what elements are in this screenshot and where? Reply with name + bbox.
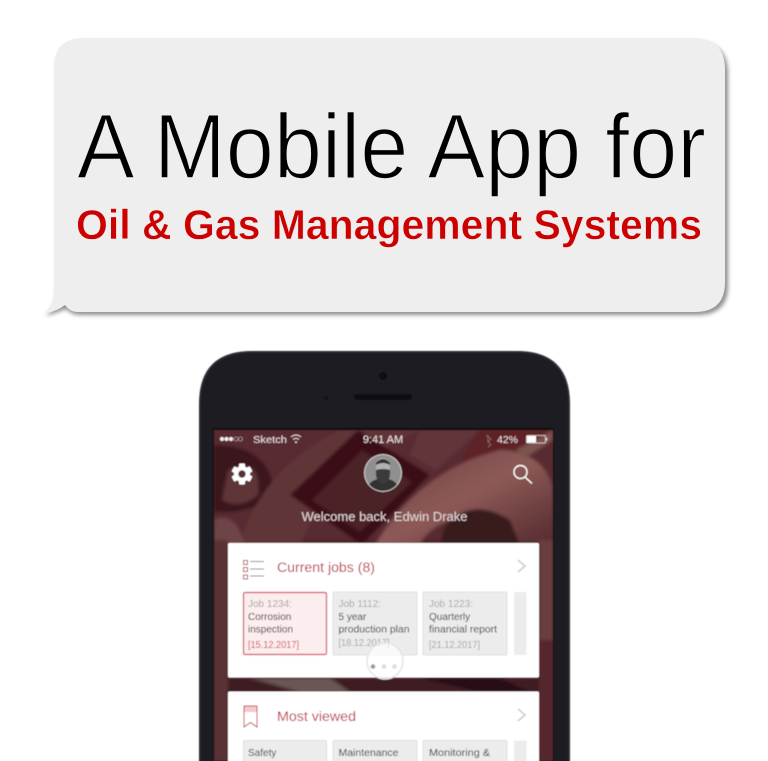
job card 1234: Job 1234: — [248, 599, 292, 610]
title: A Mobile App for — [77, 96, 706, 198]
job card 1112: [18.12.2017] — [338, 638, 390, 649]
phone — [199, 351, 570, 761]
job card 1223: financial report — [429, 624, 497, 636]
welcome text: Welcome back, Edwin Drake — [302, 509, 468, 524]
icon: chevron — [518, 709, 525, 721]
battery icon — [526, 436, 547, 443]
battery percent: 42% — [497, 434, 518, 446]
phone body — [199, 351, 570, 761]
icon: settings gear — [231, 464, 253, 484]
pagination dots — [371, 664, 397, 669]
job card 1223: Quarterly — [429, 612, 470, 623]
job card 1223: Job 1223: — [429, 599, 473, 610]
icon: chevron — [518, 560, 525, 572]
document card: monitoring: Monitoring & — [429, 748, 490, 759]
document card: safety: Safety — [248, 748, 276, 759]
icon: bookmark — [244, 706, 257, 727]
job card 1112: 5 year — [338, 612, 367, 623]
avatar — [364, 454, 402, 492]
bluetooth icon — [486, 435, 491, 447]
panel: current jobs — [228, 543, 539, 679]
job card 1234 — [244, 592, 326, 654]
front camera — [379, 372, 387, 380]
document card: monitoring — [423, 740, 507, 761]
icon: search — [514, 466, 532, 484]
icon: checklist — [244, 560, 264, 579]
job card 1112 — [333, 592, 417, 655]
job card 1112: production plan — [338, 624, 410, 636]
job card 1223: [21.12.2017] — [429, 640, 480, 651]
heading: most viewed: Most viewed — [277, 709, 356, 724]
status bar — [220, 434, 547, 447]
signal dots — [220, 437, 242, 441]
screen bezel — [213, 428, 554, 761]
earpiece speaker — [354, 394, 412, 400]
proximity sensor — [322, 394, 330, 402]
carrier: Sketch — [253, 434, 287, 446]
next job card, clipped — [514, 592, 526, 655]
job card 1234: inspection — [248, 624, 293, 636]
next document card, clipped — [514, 740, 526, 761]
wifi icon — [291, 435, 301, 442]
job card 1223 — [423, 592, 507, 655]
speech bubble — [46, 38, 728, 316]
job card 1112: Job 1112: — [338, 599, 381, 610]
clock: 9:41 AM — [363, 434, 403, 446]
screen background: pipes — [214, 430, 553, 761]
document card: safety — [244, 740, 326, 761]
document card: maintenance — [333, 740, 417, 761]
heading: current jobs: Current jobs (8) — [277, 560, 375, 575]
touch indicator — [367, 643, 403, 679]
subtitle: Oil & Gas Management Systems — [76, 201, 702, 248]
document card: maintenance: Maintenance — [338, 748, 399, 759]
job card 1234: [15.12.2017] — [248, 640, 299, 651]
phone edge highlight — [200, 352, 569, 761]
panel: most viewed — [228, 692, 539, 761]
job card 1234: Corrosion — [248, 612, 291, 623]
